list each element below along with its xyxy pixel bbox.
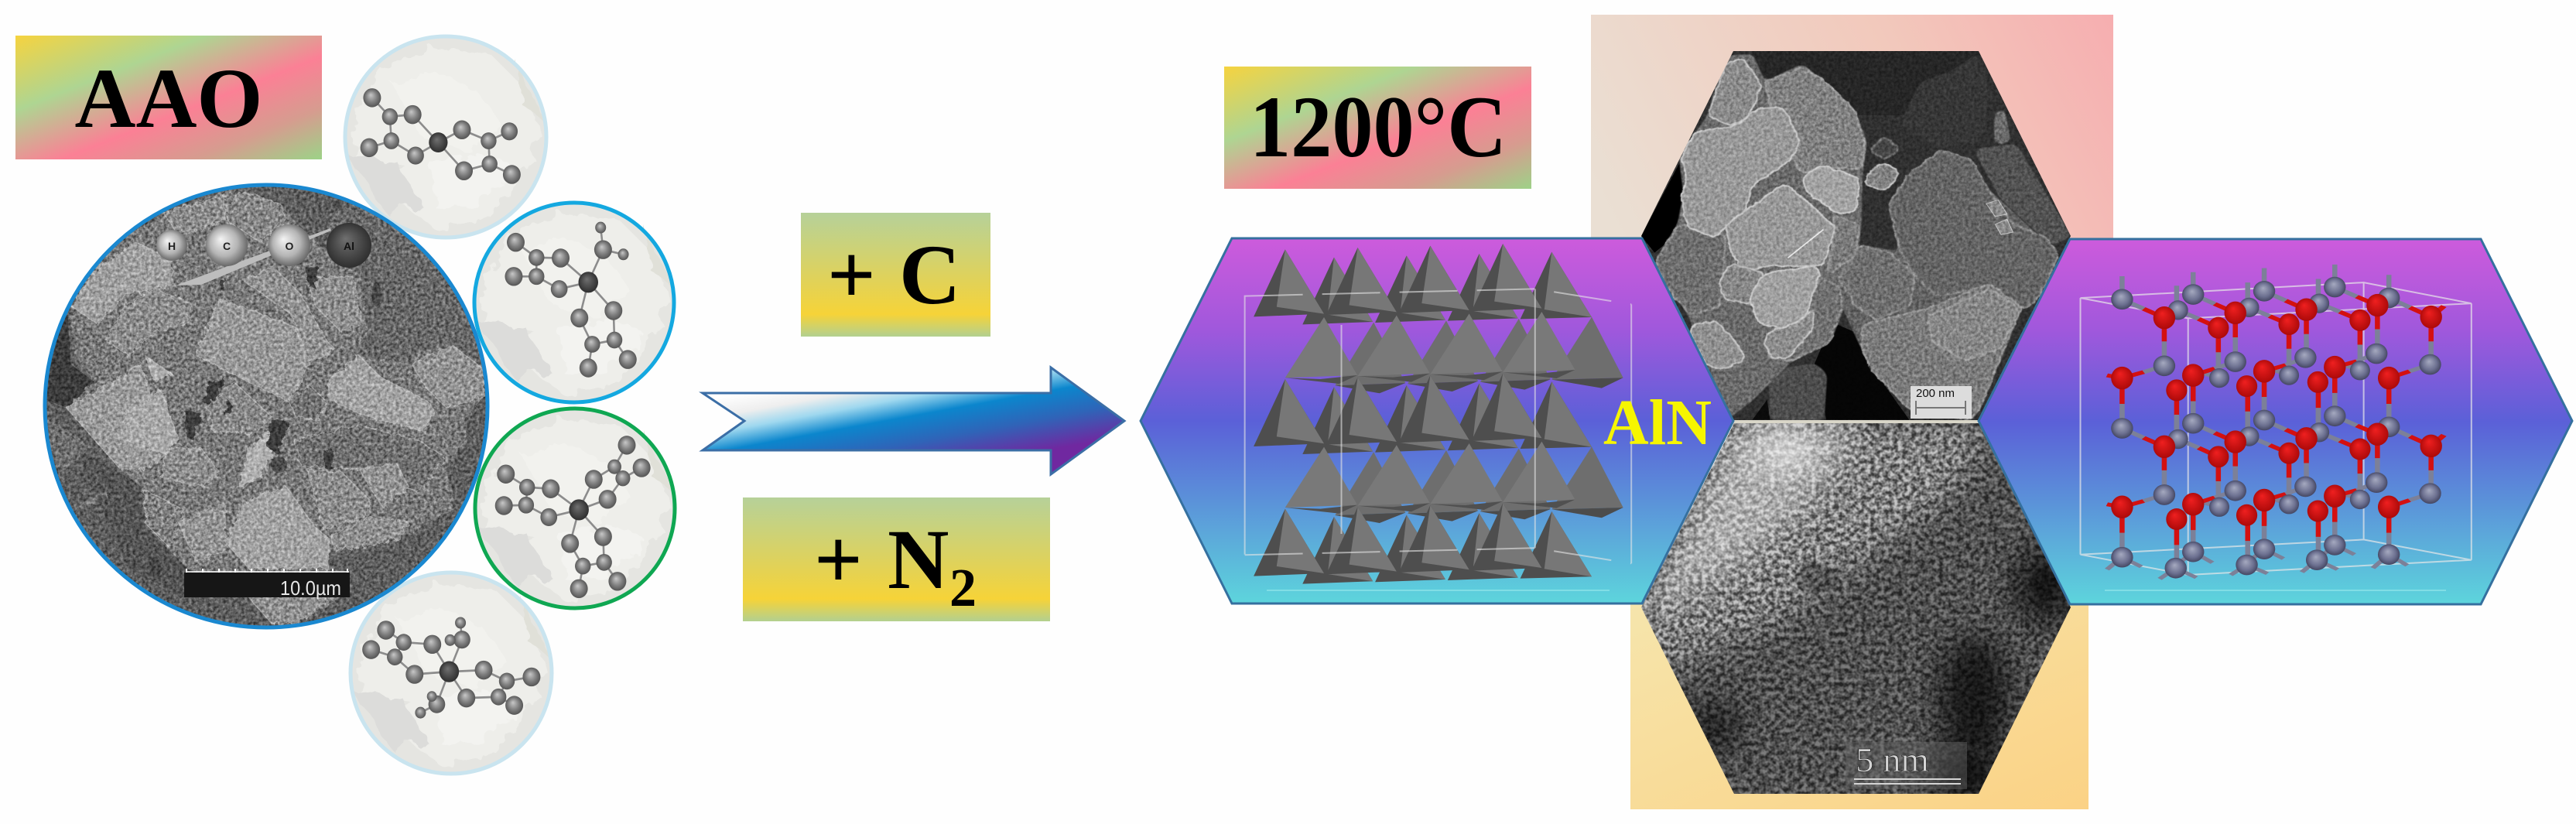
label: + N2: N <box>888 512 949 607</box>
label: + N2 <box>743 497 1050 621</box>
panel: AAO SEM image <box>43 185 489 629</box>
label: + N2: 2 <box>949 559 977 618</box>
panel: AlN SEM image hexagon <box>1625 46 2089 426</box>
panel: top background tile <box>1591 15 2113 425</box>
panel: left crystal hexagon with tetrahedra <box>1141 238 1733 603</box>
label: + C: + <box>827 227 876 322</box>
scale label: 5 nm: 5 nm <box>1856 741 1929 779</box>
scale label: 5 nm <box>1846 741 1967 789</box>
heading: AAO label <box>15 36 322 159</box>
icon: atom spheres H C O Al: O <box>286 240 294 252</box>
panel: small molecule circle blue <box>474 202 675 403</box>
panel: small molecule circle top <box>345 36 546 238</box>
icon: atom spheres H C O Al: H <box>168 240 176 252</box>
label: + N2: + <box>814 512 863 607</box>
label: 1200°C: 1200°C <box>1250 79 1507 176</box>
label: + C: C <box>899 227 960 322</box>
arrow <box>703 368 1124 474</box>
label: + C <box>801 213 990 337</box>
icon: atom spheres H C O Al: Al <box>344 240 354 252</box>
panel: right crystal hexagon with atoms <box>1979 239 2572 604</box>
panel: small molecule circle green <box>474 408 676 609</box>
icon: atom spheres H C O Al <box>156 223 371 285</box>
panel: small molecule circle bottom <box>351 573 552 774</box>
scale bar: 10.0 µm <box>184 569 350 600</box>
heading: AAO label: AAO <box>74 51 263 145</box>
bottom gray atom row <box>2107 535 2407 579</box>
panel: AlN TEM image hexagon <box>1641 423 2071 794</box>
heading: AlN label: AlN <box>1603 387 1712 459</box>
scale bar: 10.0 µm: 10.0µm <box>280 576 341 600</box>
panel: bottom background tile <box>1630 603 2089 809</box>
scale label: 200 nm <box>1911 386 1972 419</box>
scale label: 200 nm: 200 nm <box>1916 387 1955 400</box>
icon: atom spheres H C O Al: C <box>223 240 231 252</box>
